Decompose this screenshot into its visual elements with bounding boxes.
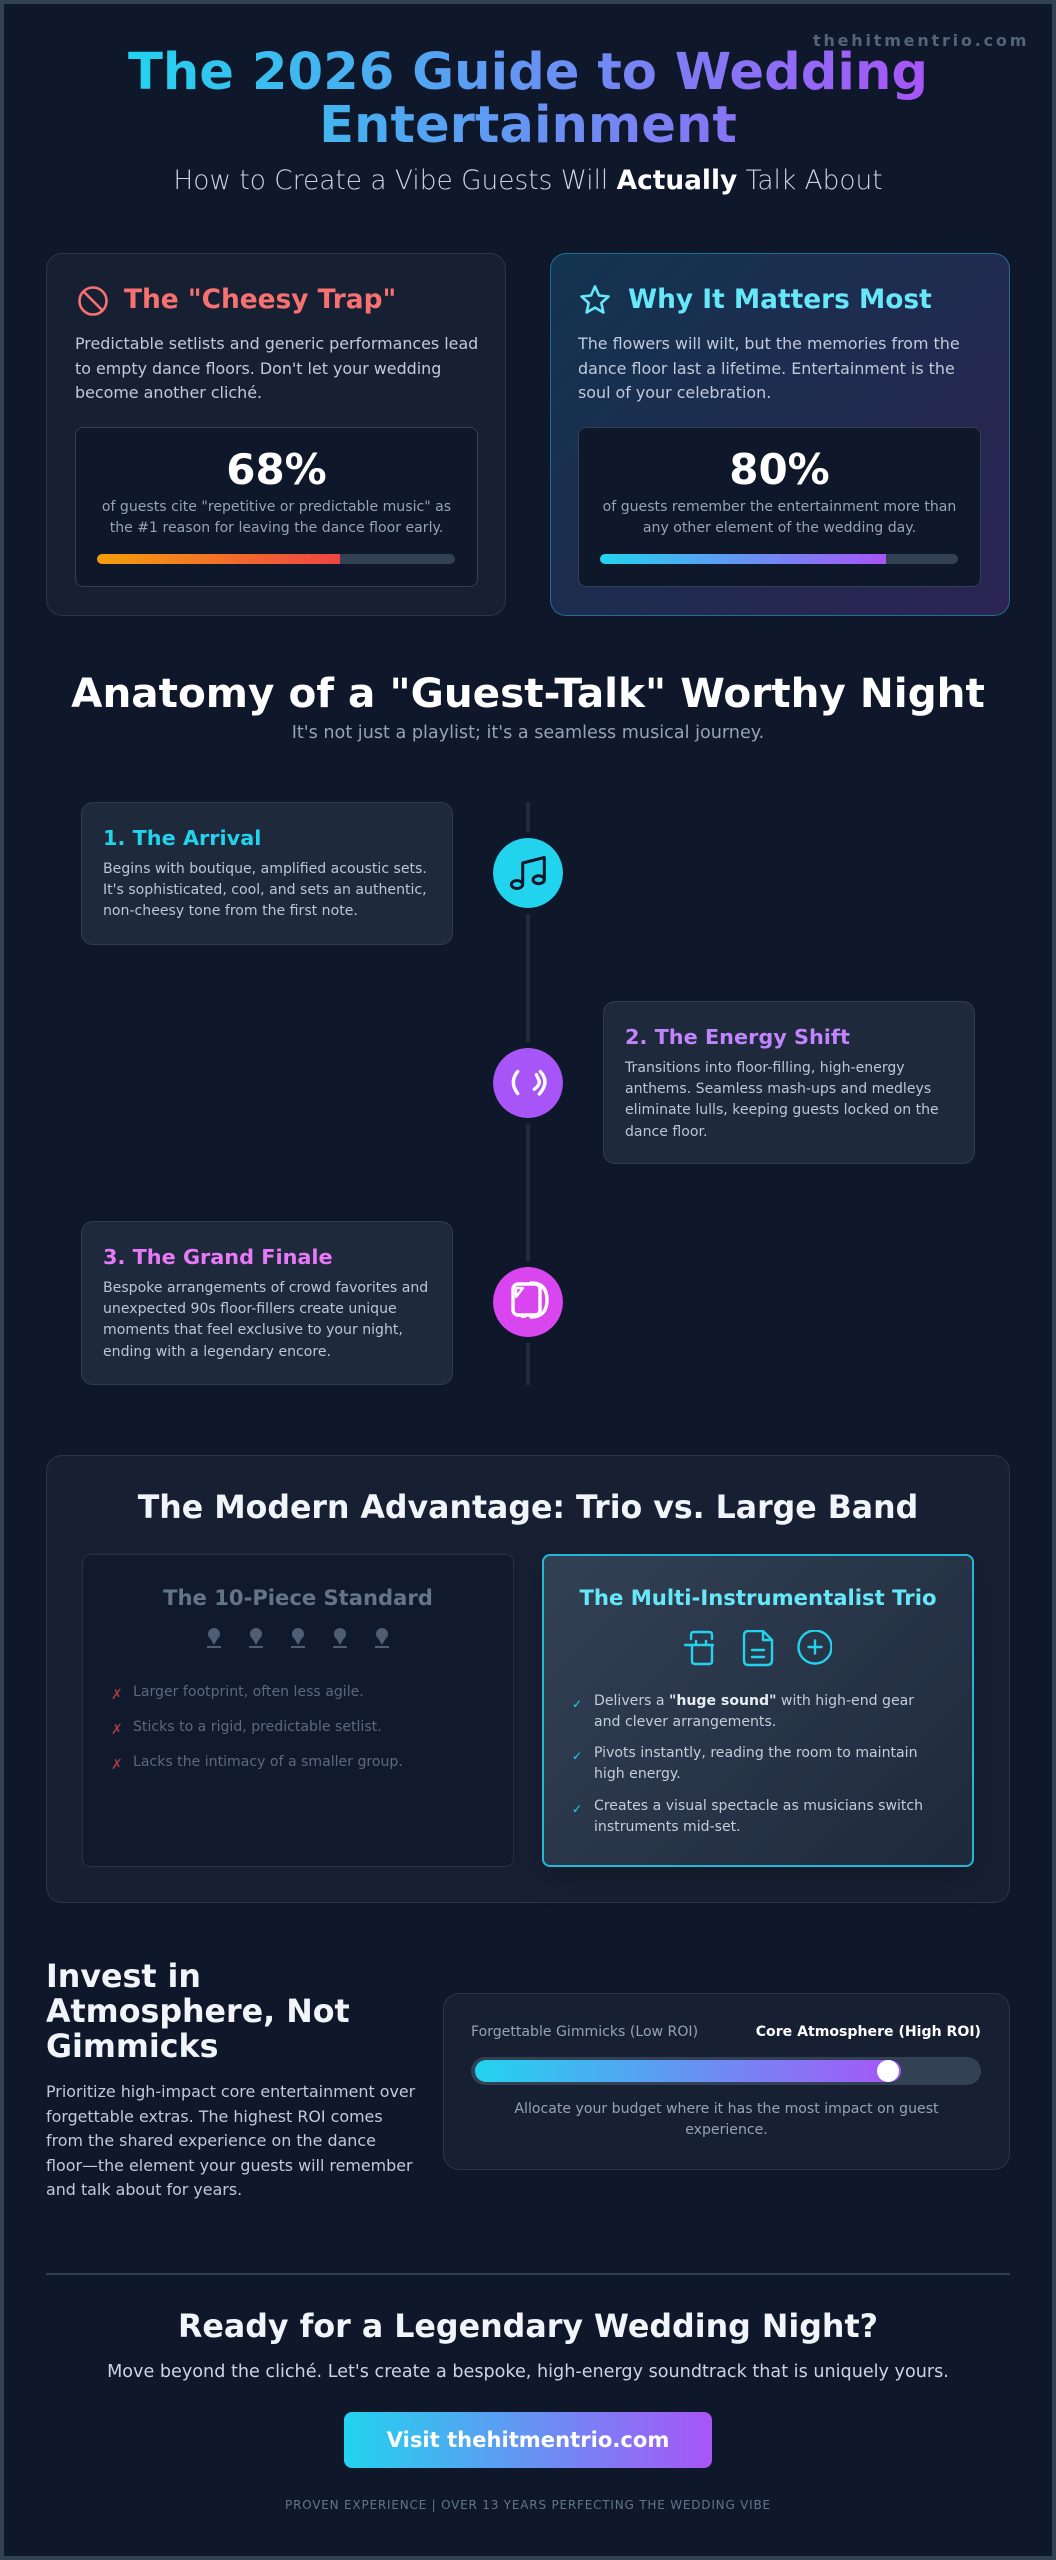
item 2: Pivots instantly, reading the room to maintain — [594, 1745, 918, 1761]
watermark: thehitmentrio.com — [813, 31, 1029, 50]
item 3: Creates a visual spectacle as musicians switch — [594, 1798, 923, 1814]
icon: energy — [493, 1048, 563, 1118]
card text — [103, 861, 427, 919]
item 2: high energy. — [594, 1766, 681, 1782]
icon: star — [580, 285, 610, 314]
card text: Transitions into floor-filling, high-energy — [625, 1060, 905, 1076]
panel: modern advantage — [46, 1455, 1010, 1903]
stat description: of guests cite "repetitive or predictable music" as — [102, 499, 451, 515]
item 1 — [594, 1693, 914, 1730]
heading: invest: Atmosphere, Not — [46, 1994, 350, 2030]
number: 68%: 68% — [226, 445, 327, 494]
column: 10-piece — [82, 1554, 514, 1867]
text: invest body: floor—the element your guests will remember — [46, 2156, 413, 2174]
panel: budget slider — [443, 1993, 1010, 2170]
slider caption: experience. — [685, 2122, 768, 2138]
stat description — [603, 499, 956, 536]
timeline card 2 — [603, 1001, 975, 1164]
icons: instruments — [684, 1630, 832, 1666]
panel: why it matters — [550, 253, 1010, 616]
title: The 2026 Guide to Wedding — [128, 42, 928, 102]
card heading: 1. The Arrival — [103, 826, 261, 850]
heading: modern advantage: The Modern Advantage: Trio vs. Large Band — [138, 1490, 918, 1526]
cross 3: ✗ — [111, 1757, 123, 1773]
stat box: 68% — [75, 427, 478, 587]
text: why it matters body: dance floor last a lifetime. Entertainment is the — [578, 358, 955, 378]
subtitle: How to Create a Vibe Guests Will Actually Talk About — [173, 165, 883, 196]
item 2: Sticks to a rigid, predictable setlist. — [133, 1719, 382, 1735]
stat description: of guests remember the entertainment more than — [603, 499, 956, 515]
title — [100, 46, 956, 156]
icon: music note — [493, 838, 563, 908]
card text — [103, 1280, 428, 1360]
stat description: the #1 reason for leaving the dance floor early. — [110, 520, 443, 536]
heading: invest: Invest in — [46, 1959, 201, 1995]
text: CTA body: Move beyond the cliché. Let's create a bespoke, high-energy soundtrack that is uniquely yours. — [107, 2362, 949, 2382]
heading: cheesy trap: The "Cheesy Trap" — [124, 284, 396, 315]
list: trio advantages — [572, 1693, 923, 1835]
column title: The Multi-Instrumentalist Trio — [579, 1585, 937, 1610]
text: invest body: Prioritize high-impact core entertainment over — [46, 2082, 415, 2101]
item 3: instruments mid-set. — [594, 1819, 741, 1835]
slider caption: Allocate your budget where it has the most impact on guest — [514, 2101, 939, 2117]
card text: unexpected 90s floor-fillers create unique — [103, 1301, 397, 1317]
check 2: ✓ — [572, 1749, 582, 1763]
card text: moments that feel exclusive to your night, — [103, 1322, 403, 1338]
button: Visit thehitmentrio.com — [387, 2427, 669, 2452]
card text — [624, 1060, 939, 1140]
item 1: Larger footprint, often less agile. — [133, 1684, 364, 1700]
title: Entertainment — [319, 95, 737, 155]
item 2 — [594, 1745, 918, 1782]
item 3 — [594, 1798, 923, 1835]
heading: invest — [46, 1959, 350, 2065]
column title: The 10-Piece Standard — [163, 1585, 433, 1610]
text: cheesy trap body: to empty dance floors. Don't let your wedding — [75, 358, 441, 378]
text: cheesy trap body: Predictable setlists and generic performances lead — [75, 334, 478, 353]
card text: non-cheesy tone from the first note. — [103, 903, 358, 919]
card heading: 2. The Energy Shift — [625, 1025, 850, 1049]
card text: anthems. Seamless mash-ups and medleys — [625, 1081, 931, 1097]
timeline card 3 — [81, 1221, 453, 1385]
number: 80%: 80% — [729, 445, 830, 494]
progress bar: 68% — [97, 554, 455, 564]
card text: ending with a legendary encore. — [103, 1344, 331, 1360]
panel: cheesy trap — [46, 253, 506, 616]
card text: Begins with boutique, amplified acoustic sets. — [103, 861, 427, 877]
card text: dance floor. — [625, 1124, 707, 1140]
button — [344, 2412, 712, 2468]
stat description: any other element of the wedding day. — [643, 520, 916, 536]
check 3: ✓ — [572, 1802, 582, 1816]
text: why it matters body — [578, 334, 960, 402]
text: why it matters body: soul of your celebration. — [578, 383, 771, 402]
footer: PROVEN EXPERIENCE | OVER 13 YEARS PERFECTING THE WEDDING VIBE — [285, 2498, 771, 2512]
slider caption — [514, 2101, 939, 2138]
timeline line — [526, 802, 530, 1385]
text: invest body: forgettable extras. The highest ROI comes — [46, 2106, 383, 2126]
cross 2: ✗ — [111, 1722, 123, 1738]
slider fill — [475, 2060, 901, 2082]
heading: invest: Gimmicks — [46, 2029, 218, 2065]
card text: Bespoke arrangements of crowd favorites and — [103, 1280, 428, 1296]
check 1: ✓ — [572, 1697, 582, 1711]
slider — [471, 2057, 981, 2085]
stat description — [102, 499, 451, 536]
item 3: Lacks the intimacy of a smaller group. — [133, 1754, 403, 1770]
timeline card 1 — [81, 802, 453, 945]
label: high ROI: Core Atmosphere (High ROI) — [756, 2024, 981, 2040]
text: cheesy trap body: become another cliché. — [75, 383, 262, 402]
cross 1: ✗ — [111, 1687, 123, 1703]
subheading: anatomy: It's not just a playlist; it's a seamless musical journey. — [292, 723, 764, 743]
icons: five musicians — [207, 1628, 389, 1648]
text: invest body — [46, 2082, 416, 2199]
heading: CTA: Ready for a Legendary Wedding Night? — [178, 2309, 878, 2345]
stat box: 80% — [578, 427, 981, 587]
icon: ban — [78, 286, 108, 316]
progress bar: 80% — [600, 554, 958, 564]
item 1: and clever arrangements. — [594, 1714, 776, 1730]
text: cheesy trap body — [75, 334, 478, 402]
text: invest body: from the shared experience on the dance — [46, 2131, 376, 2150]
card text: It's sophisticated, cool, and sets an authentic, — [103, 882, 427, 898]
column: trio — [542, 1554, 974, 1867]
icon: finale — [493, 1267, 563, 1337]
heading: why it matters: Why It Matters Most — [628, 284, 932, 315]
card heading: 3. The Grand Finale — [103, 1245, 333, 1269]
item 1: Delivers a "huge sound" with high-end gear — [594, 1693, 914, 1709]
heading: anatomy: Anatomy of a "Guest-Talk" Worthy Night — [71, 669, 985, 717]
label: low ROI: Forgettable Gimmicks (Low ROI) — [471, 2024, 698, 2040]
slider knob — [877, 2060, 899, 2082]
card text: eliminate lulls, keeping guests locked on the — [625, 1102, 939, 1118]
text: why it matters body: The flowers will wilt, but the memories from the — [578, 334, 960, 353]
text: invest body: and talk about for years. — [46, 2180, 242, 2199]
list: band drawbacks — [111, 1684, 403, 1773]
